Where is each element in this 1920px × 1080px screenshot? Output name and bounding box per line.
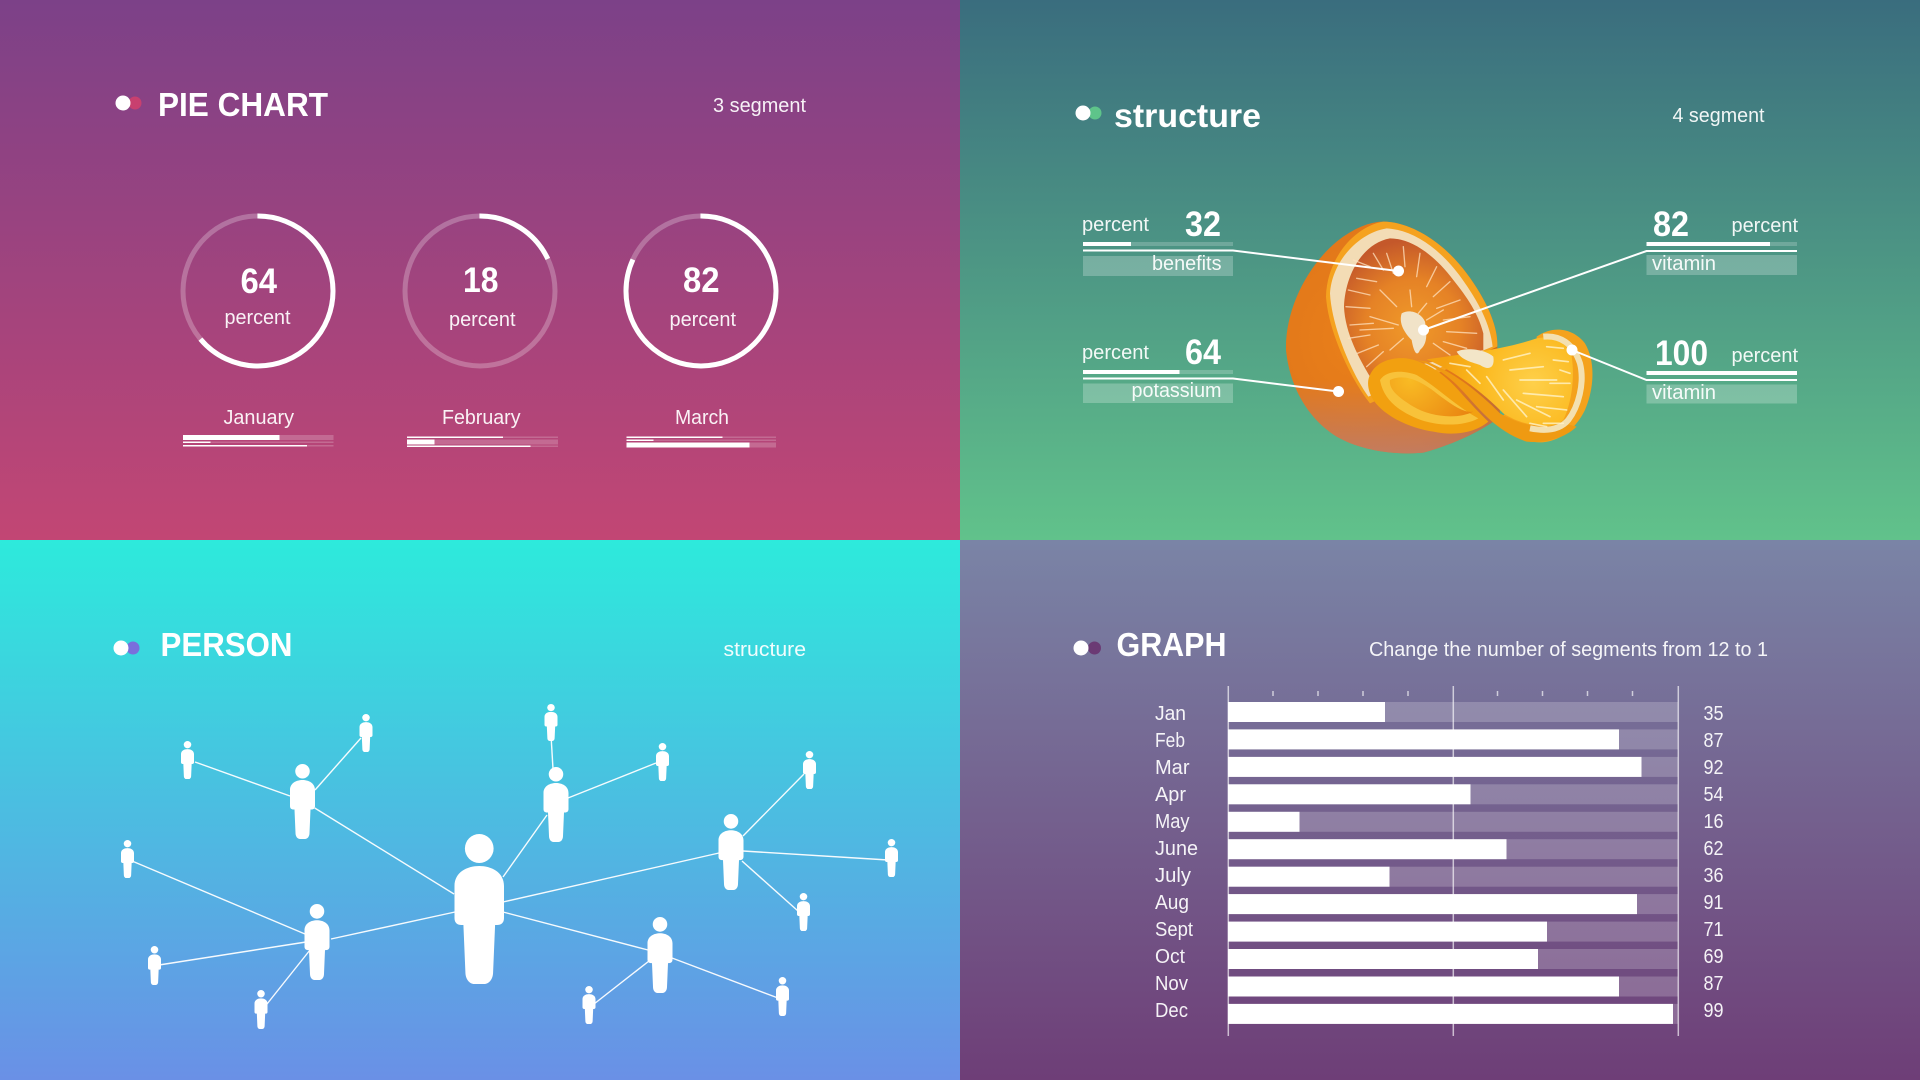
icon: title dots	[116, 96, 142, 110]
value labels: 87	[1704, 730, 1724, 752]
month labels: Dec	[1155, 1000, 1188, 1022]
panel: graph	[960, 540, 1920, 1080]
month labels: Aug	[1155, 892, 1189, 914]
callout: 82 percent vitamin: vitamin	[1652, 253, 1716, 275]
donut: March 82 percent: percent	[670, 309, 736, 331]
text: chart subtitle: Change the number of segments from 12 to 1	[1369, 639, 1768, 661]
month labels	[1155, 703, 1198, 1022]
panel: structure	[960, 0, 1920, 540]
icons: five medium people	[290, 764, 744, 993]
donut: January 64 percent: percent	[224, 307, 291, 329]
value labels: 36	[1704, 865, 1724, 887]
bar chart tracks	[1228, 702, 1678, 1024]
month labels: Jan	[1155, 703, 1186, 725]
callout: percent 64 potassium: percent	[1082, 342, 1149, 364]
heading: graph: GRAPH	[1116, 626, 1226, 663]
month labels: July	[1155, 865, 1191, 887]
label and bars: March	[626, 407, 776, 448]
heading: structure: structure	[1114, 97, 1261, 134]
label and bars: February: February	[442, 407, 520, 429]
icon: title dots	[1074, 640, 1101, 656]
callout: percent 64 potassium: potassium	[1132, 380, 1222, 402]
icon: title dots	[1076, 106, 1102, 120]
month labels: Feb	[1155, 730, 1185, 752]
text: 3 segment: 3 segment	[713, 95, 806, 117]
icon: central large person	[454, 834, 504, 984]
value labels: 99	[1704, 1000, 1724, 1022]
donut: February 18 percent	[405, 216, 555, 366]
label and bars: March: March	[675, 407, 729, 429]
callout: 82 percent vitamin: percent	[1732, 215, 1798, 237]
value labels: 62	[1704, 838, 1724, 860]
network connection lines	[132, 735, 888, 1004]
image: orange with twisted peel	[1286, 222, 1592, 453]
panel: person	[0, 540, 960, 1080]
callout: 100 percent vitamin	[1566, 334, 1798, 404]
chart axis lines and ticks	[1228, 686, 1678, 1036]
donut: March 82 percent: 82	[683, 261, 720, 300]
donut: February 18 percent: percent	[449, 309, 516, 331]
callout: 100 percent vitamin: percent	[1732, 345, 1798, 367]
donut: January 64 percent: 64	[240, 262, 277, 301]
text: 4 segment: 4 segment	[1672, 105, 1765, 127]
icon: title dots	[114, 640, 140, 656]
month labels: June	[1155, 838, 1198, 860]
month labels: Sept	[1155, 919, 1193, 941]
value labels: 91	[1704, 892, 1724, 914]
label and bars: February	[407, 407, 558, 447]
value labels: 87	[1704, 973, 1724, 995]
donut: March 82 percent	[626, 216, 776, 366]
month labels: Mar	[1155, 757, 1190, 779]
icons: twelve small people	[121, 704, 898, 1029]
donut: February 18 percent: 18	[463, 261, 498, 300]
callout: 82 percent vitamin	[1418, 205, 1798, 336]
label and bars: January	[183, 407, 334, 446]
panel: pie chart	[0, 0, 960, 540]
value labels: 69	[1704, 946, 1724, 968]
callout: percent 64 potassium: 64	[1185, 333, 1221, 372]
callout: percent 32 benefits: benefits	[1152, 253, 1222, 275]
callout: percent 32 benefits: percent	[1082, 214, 1149, 236]
callout: 100 percent vitamin: vitamin	[1652, 382, 1716, 404]
callout: 82 percent vitamin: 82	[1653, 205, 1689, 244]
callout: percent 32 benefits: 32	[1185, 205, 1221, 244]
donut: January 64 percent	[183, 216, 333, 366]
value labels: 54	[1704, 784, 1724, 806]
month labels: Apr	[1155, 784, 1186, 806]
month labels: Oct	[1155, 946, 1185, 968]
value labels: 35	[1704, 703, 1724, 725]
callout: 100 percent vitamin: 100	[1655, 334, 1708, 373]
value labels: 71	[1704, 919, 1724, 941]
label and bars: January: January	[224, 407, 294, 429]
heading: person: PERSON	[160, 626, 292, 663]
value labels: 16	[1704, 811, 1724, 833]
value labels: 92	[1704, 757, 1724, 779]
month labels: May	[1155, 811, 1190, 833]
callout: percent 32 benefits	[1082, 205, 1404, 276]
month labels: Nov	[1155, 973, 1188, 995]
bar chart filled values	[1228, 702, 1673, 1024]
value labels	[1704, 703, 1724, 1022]
callout: percent 64 potassium	[1082, 333, 1344, 403]
text: structure: structure	[724, 639, 806, 661]
heading: pie chart: PIE CHART	[158, 86, 328, 123]
